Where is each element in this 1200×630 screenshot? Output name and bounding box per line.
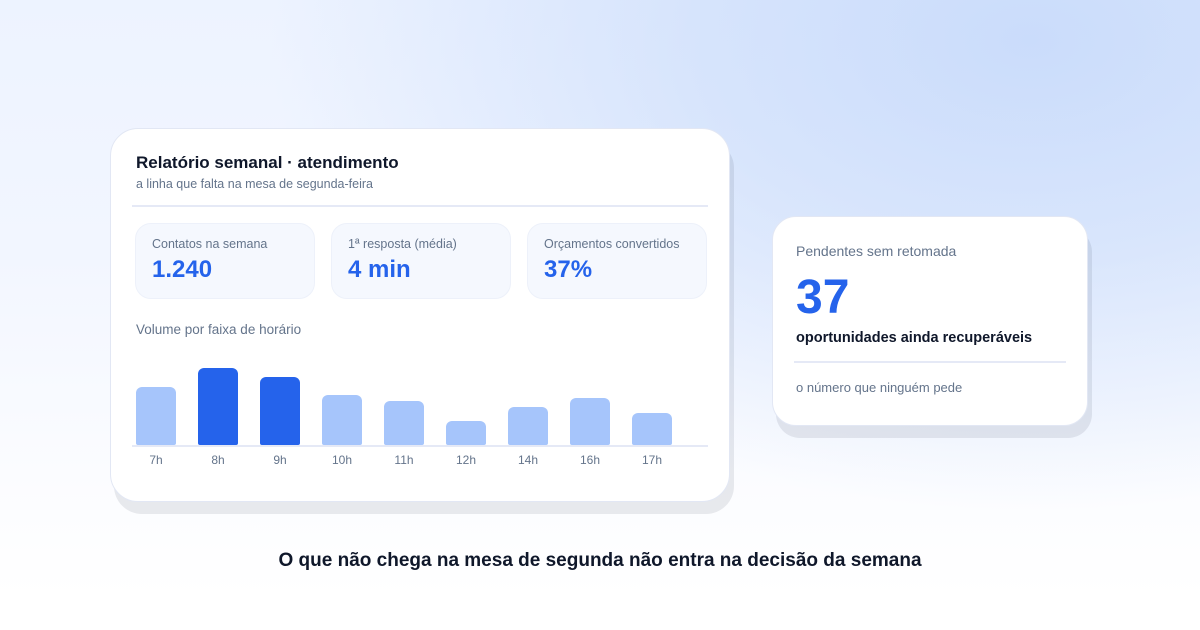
axis label 10h: 10h [332, 453, 352, 467]
axis label 14h: 14h [518, 453, 538, 467]
bar chart [132, 368, 708, 447]
panel shadow: weekly report [114, 140, 734, 514]
bar 11h [384, 401, 424, 445]
axis label 11h: 11h [394, 453, 414, 467]
axis label 16h: 16h [580, 453, 600, 467]
panel: weekly report [110, 128, 730, 502]
panel: pending [772, 216, 1088, 426]
stat card: primeira resposta [331, 223, 511, 299]
bar 7h [136, 387, 176, 445]
bar 9h [260, 377, 300, 445]
chart baseline [132, 445, 708, 447]
axis label 12h: 12h [456, 453, 476, 467]
axis label 8h: 8h [211, 453, 225, 467]
bar 17h [632, 413, 672, 445]
bar 8h [198, 368, 238, 445]
heading: report title: Relatório semanal · atendimento [136, 153, 399, 172]
text: report subtitle: a linha que falta na mesa de segunda-feira [136, 177, 373, 191]
axis label 7h: 7h [149, 453, 163, 467]
chart heading: Volume por faixa de horário [136, 322, 301, 337]
panel shadow: pending [776, 228, 1092, 438]
pending number: 37 [796, 271, 849, 324]
stat label: Orçamentos convertidos [544, 237, 679, 251]
pending label: Pendentes sem retomada [796, 243, 956, 259]
caption: O que não chega na mesa de segunda não entra na decisão da semana [278, 550, 922, 571]
bar 16h [570, 398, 610, 445]
stat card: contatos [135, 223, 315, 299]
stat value: 1.240 [152, 256, 212, 283]
pending description: oportunidades ainda recuperáveis [796, 330, 1032, 346]
stat value: 37% [544, 256, 592, 283]
stat card: orçamentos [527, 223, 707, 299]
axis label 9h: 9h [273, 453, 287, 467]
bar 12h [446, 421, 486, 445]
bar 14h [508, 407, 548, 445]
stat value: 4 min [348, 256, 411, 283]
stat label: 1ª resposta (média) [348, 237, 457, 251]
divider [794, 361, 1066, 363]
pending note: o número que ninguém pede [796, 380, 962, 395]
axis label 17h: 17h [642, 453, 662, 467]
divider [132, 205, 708, 207]
stat label: Contatos na semana [152, 237, 267, 251]
bar 10h [322, 395, 362, 445]
